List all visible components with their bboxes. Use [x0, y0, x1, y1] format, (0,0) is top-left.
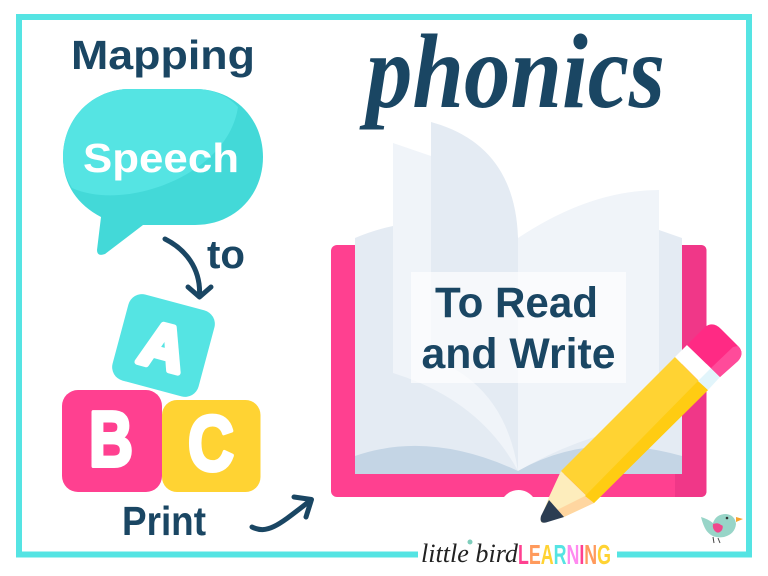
- arrow: speech to blocks: [165, 239, 211, 297]
- book cover: [331, 245, 706, 497]
- heading: Mapping: Mapping: [71, 32, 255, 78]
- text panel: To Read and Write: [411, 272, 626, 383]
- label: Print: Print: [122, 498, 206, 544]
- illustration: open book: [331, 122, 706, 497]
- block C: [162, 399, 260, 492]
- icon: alphabet blocks: [62, 291, 260, 492]
- block B: B: [89, 395, 133, 483]
- icon: small bird: [701, 514, 743, 543]
- icon: pencil: [541, 324, 742, 523]
- logo script: little bird: little bird: [421, 539, 519, 568]
- text panel: To Read and Write: and Write: [422, 330, 616, 378]
- arrow: print to book: [252, 497, 312, 530]
- block C: C: [188, 399, 234, 487]
- icon: speech bubble with Speech label: [63, 89, 263, 255]
- block B: [62, 390, 162, 492]
- block A: [109, 291, 218, 400]
- text panel: To Read and Write: To Read: [435, 279, 598, 327]
- label: to: to: [207, 233, 245, 277]
- book pages: [355, 122, 682, 474]
- logo wordmark: LEARNING: LEARNING: [518, 539, 611, 570]
- label: Speech: Speech: [83, 135, 239, 181]
- title: phonics: phonics: [359, 13, 665, 130]
- logo: little bird LEARNING: [421, 539, 611, 570]
- block A: A: [132, 308, 194, 387]
